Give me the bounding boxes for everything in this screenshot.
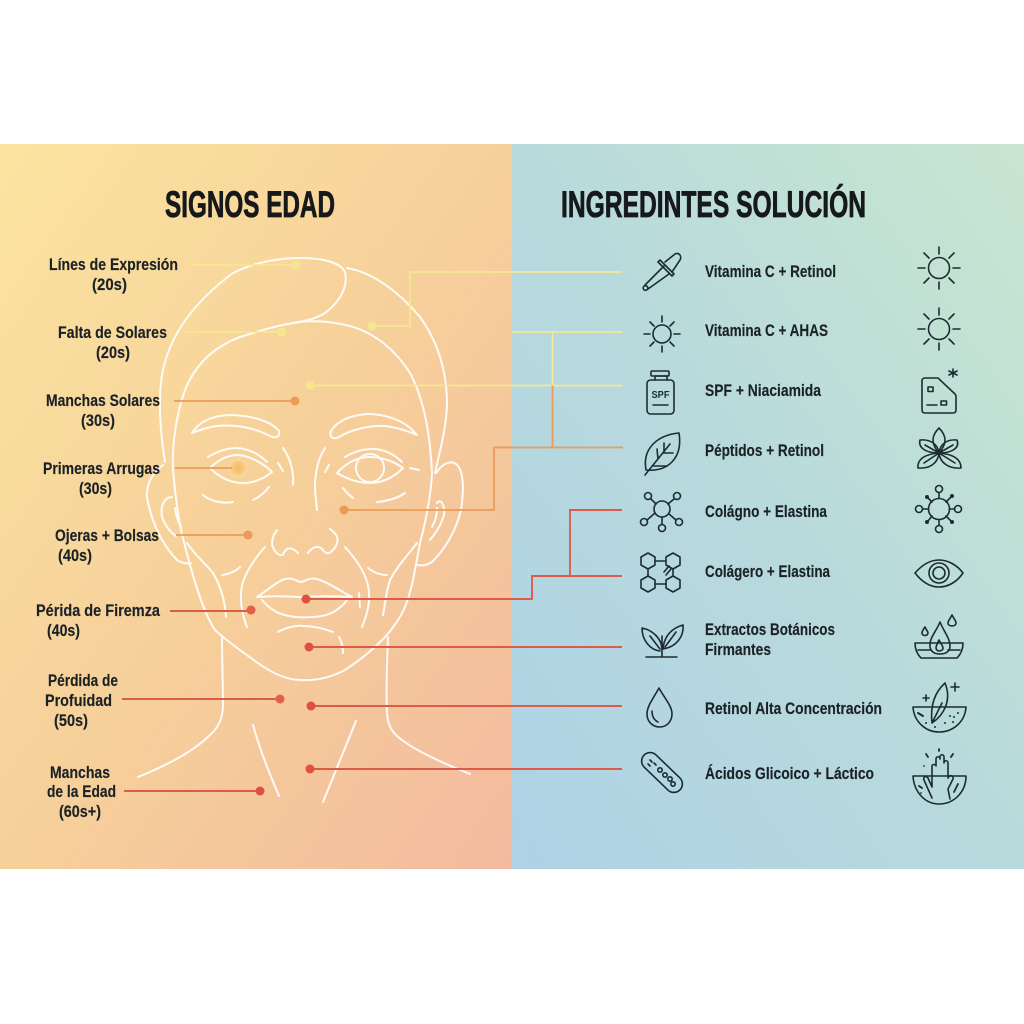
eyebrows (192, 415, 279, 437)
text: colágeno + elastina 2: Colágero + Elastina (705, 563, 831, 581)
label: falta de solares 20s: Falta de Solares (58, 324, 167, 342)
label: ojeras y bolsas 40s (55, 527, 159, 565)
label: pérdida de profundidad 50s: Profuidad (45, 692, 112, 710)
label: líneas de expresión 20s (49, 256, 178, 294)
panel: ingredientes solución background (512, 144, 1024, 869)
label: manchas de la edad 60s: (60s+) (59, 803, 101, 821)
nose (272, 529, 338, 555)
text: extractos botánicos firmantes: Extractos Botánicos (705, 621, 835, 639)
neck (138, 637, 470, 802)
icon: spf jar: SPF (652, 390, 670, 401)
icon: leaf in skin bowl (913, 683, 966, 732)
heading: signos edad: SIGNOS EDAD (165, 184, 335, 225)
label: manchas solares 30s: Manchas Solares (46, 392, 160, 410)
label: falta de solares 20s (58, 324, 167, 362)
label: manchas de la edad 60s: Manchas (50, 764, 110, 782)
icon: botanical flower (918, 428, 961, 468)
heading: ingredientes solución: INGREDINTES SOLUCIÓN (561, 183, 866, 225)
right ear (418, 462, 463, 565)
text: péptidos + retinol: Péptidos + Retinol (705, 442, 824, 460)
label: manchas de la edad 60s: de la Edad (47, 783, 116, 801)
label: manchas solares 30s: (30s) (81, 412, 115, 430)
connectors: short label pointers with dots (122, 260, 300, 796)
lips (257, 578, 360, 617)
icon: virus molecule (916, 486, 962, 532)
icon: sun left (644, 316, 680, 352)
label: pérdida de firmeza 40s: Périda de Firemza (36, 602, 161, 620)
label: pérdida de profundidad 50s: Pérdida de (48, 672, 118, 690)
label: pérdida de profundidad 50s (45, 672, 118, 730)
labels: signs by age (36, 256, 178, 821)
connectors: face to ingredient lines (302, 272, 623, 774)
icon: capsule (638, 749, 686, 796)
left eye iris glow (228, 458, 248, 478)
text: extractos botánicos firmantes (705, 621, 835, 659)
label: pérdida de firmeza 40s: (40s) (47, 622, 80, 640)
ingredient labels (705, 263, 882, 783)
chin (278, 626, 343, 653)
text: spf + niaciamida: SPF + Niaciamida (705, 382, 822, 400)
icon: flame and water bowl (915, 615, 963, 658)
label: manchas de la edad 60s (47, 764, 116, 821)
label: primeras arrugas 30s: (30s) (79, 480, 112, 498)
icon: sun right 2 (918, 308, 960, 350)
left ear (147, 465, 191, 563)
label: ojeras y bolsas 40s: (40s) (58, 547, 92, 565)
eyes (210, 455, 272, 483)
icon: water drop (647, 688, 672, 727)
label: líneas de expresión 20s: Línes de Expresión (49, 256, 178, 274)
panel: signos edad background (0, 144, 512, 869)
label: primeras arrugas 30s (43, 460, 160, 498)
icon: leaf (645, 433, 680, 475)
text: vitamina c + ahas: Vitamina C + AHAS (705, 322, 828, 340)
icon: card with star (922, 369, 957, 413)
icon: dropper (643, 253, 681, 290)
label: pérdida de firmeza 40s (36, 602, 161, 640)
label: manchas solares 30s (46, 392, 160, 430)
text: colágeno + elastina: Colágno + Elastina (705, 503, 828, 521)
text: vitamina c + retinol: Vitamina C + Retinol (705, 263, 836, 281)
text: extractos botánicos firmantes: Firmantes (705, 641, 771, 659)
icon: sprout (642, 625, 683, 657)
label: primeras arrugas 30s: Primeras Arrugas (43, 460, 160, 478)
label: falta de solares 20s: (20s) (96, 344, 130, 362)
text: retinol alta concentración: Retinol Alta Concentración (705, 700, 882, 718)
face line illustration (138, 258, 470, 802)
icon: spf jar (647, 371, 674, 414)
icon: molecule (640, 492, 682, 532)
cheek and jaw lines (187, 543, 417, 627)
label: pérdida de profundidad 50s: (50s) (54, 712, 88, 730)
icon: hand in skin bowl (913, 749, 966, 804)
text: ácidos glicoico + láctico: Ácidos Glicoico + Láctico (705, 764, 874, 783)
label: ojeras y bolsas 40s: Ojeras + Bolsas (55, 527, 159, 545)
label: líneas de expresión 20s: (20s) (92, 276, 127, 294)
icon: hexagon collagen (641, 553, 680, 592)
icon: sun right 1 (918, 247, 960, 289)
icon: eye (915, 560, 963, 587)
